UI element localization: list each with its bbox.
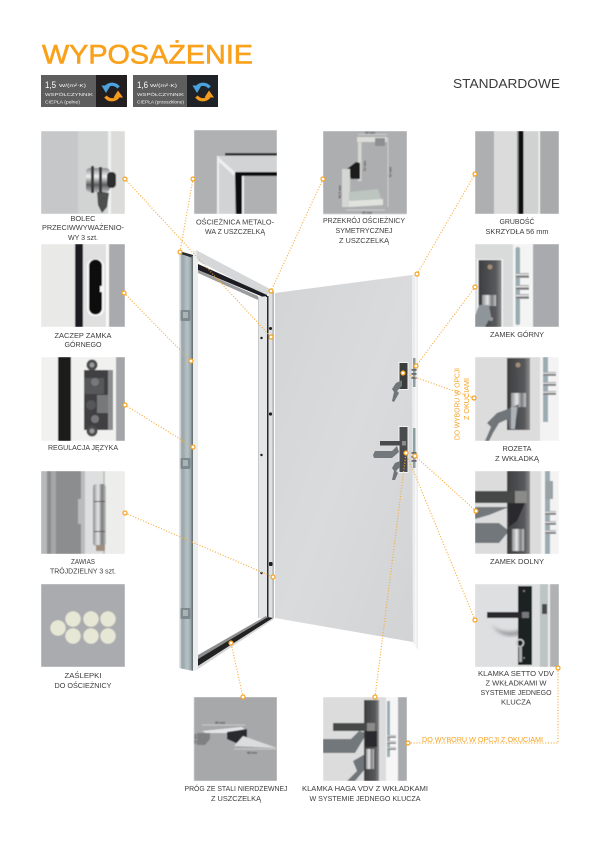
panel: próg — [184, 697, 288, 803]
callout markers — [122, 172, 560, 745]
caption — [42, 214, 125, 242]
photo: Setto handle — [475, 584, 559, 667]
caption — [486, 217, 548, 236]
photo: frame plugs — [41, 584, 125, 667]
panel: ościeżnica — [194, 130, 277, 236]
photo: rosette with cylinder — [475, 357, 558, 441]
caption: GÓRNEGO — [64, 340, 102, 349]
caption: Z USZCZELKĄ — [211, 794, 261, 803]
caption — [478, 669, 554, 706]
caption: PRÓG ZE STALI NIERDZEWNEJ — [184, 784, 288, 793]
caption: OŚCIEŻNICA METALO- — [196, 218, 275, 226]
door frame — [179, 250, 274, 671]
badge: thermal coefficient 1,6: 1,6 — [137, 80, 148, 91]
caption: KLAMKA SETTO VDV — [478, 669, 554, 678]
caption: ZAWIAS — [71, 557, 95, 566]
caption — [323, 216, 405, 245]
caption: Z WKŁADKĄ — [495, 454, 539, 463]
caption: BOLEC — [70, 214, 96, 223]
caption — [495, 444, 539, 463]
photo: metal frame corner — [194, 130, 277, 214]
vertical label: do wyboru w opcji z okuciami: DO WYBORU W OPCJI — [452, 368, 462, 440]
panel: klamka setto — [475, 584, 559, 706]
caption: W SYSTEMIE JEDNEGO KLUCZA — [310, 794, 421, 803]
badge: thermal coefficient 1,5: 1,5 — [45, 80, 56, 91]
panel: przekrój — [323, 131, 407, 245]
photo: upper lock — [475, 244, 559, 327]
photo: upper lock strike — [41, 244, 125, 327]
photo: Haga handle — [323, 697, 407, 781]
caption: DO OŚCIEŻNICY — [54, 681, 112, 690]
vertical label: do wyboru w opcji z okuciami: Z OKUCIAMI — [462, 378, 471, 420]
panel: zawias — [41, 471, 125, 576]
badge: thermal coefficient 1,6: W/(m²·K) — [150, 83, 178, 88]
caption — [196, 218, 275, 236]
caption: PRZECIWWYWAŻENIO- — [42, 223, 125, 232]
caption: Z WKŁADKAMI W — [486, 678, 547, 688]
caption: KLUCZA — [501, 698, 531, 706]
photo: frame cross-section: 49 mm — [362, 211, 372, 215]
panel: zaślepki — [41, 584, 125, 690]
panel: zamek dolny — [475, 471, 559, 566]
badge: thermal coefficient 1,6 — [133, 75, 218, 107]
badge: thermal coefficient 1,5: WSPÓŁCZYNNIK — [45, 91, 94, 97]
photo: frame cross-section — [323, 131, 407, 215]
hinges on frame — [180, 310, 190, 619]
heading: standardowe: STANDARDOWE — [453, 77, 560, 91]
door leaf — [275, 274, 418, 650]
caption — [54, 331, 112, 349]
badge: thermal coefficient 1,6: CIEPŁA (przeszklone) — [137, 100, 184, 104]
photo: frame cross-section: 50 mm — [363, 161, 367, 171]
caption: ZAŚLEPKI — [64, 671, 102, 680]
photo: three-part hinge — [41, 471, 125, 554]
badge: thermal coefficient 1,5: CIEPŁA (pełne) — [45, 100, 81, 104]
label: do wyboru w opcji z okuciami: DO WYBORU W OPCJI Z OKUCIAMI — [422, 735, 543, 744]
photo: frame cross-section: 90 mm — [388, 167, 392, 177]
badge: thermal coefficient 1,6: WSPÓŁCZYNNIK — [137, 91, 185, 97]
photo: anti-burglary bolt — [41, 131, 125, 214]
photo: latch adjustment — [41, 357, 125, 441]
badge: thermal coefficient 1,5 — [41, 75, 127, 107]
caption: PRZEKRÓJ OŚCIEŻNICY — [323, 216, 405, 225]
panel: zaczep — [41, 244, 125, 349]
caption: SYMETRYCZNEJ — [336, 226, 393, 235]
caption: WY 3 szt. — [68, 233, 98, 242]
leader lines — [124, 174, 558, 743]
caption: ZAMEK DOLNY — [490, 557, 544, 566]
photo: stainless threshold: 48 mm — [247, 751, 257, 755]
panel: klamka haga — [302, 697, 428, 803]
caption: ZACZEP ZAMKA — [54, 331, 112, 340]
badge: thermal coefficient 1,5: W/(m²·K) — [59, 83, 87, 88]
frame strike holes — [260, 327, 272, 574]
photo: stainless threshold: 18 mm — [194, 734, 198, 744]
photo: leaf thickness — [475, 131, 559, 214]
title: WYPOSAŻENIE — [42, 38, 253, 70]
panel: zamek górny — [475, 244, 559, 339]
caption: SYSTEMIE JEDNEGO — [480, 688, 552, 697]
caption — [50, 557, 116, 576]
vertical label: do wyboru w opcji z okuciami — [452, 368, 471, 440]
panel: grubość — [475, 131, 559, 236]
caption — [302, 784, 428, 803]
caption: WA Z USZCZELKĄ — [205, 227, 265, 236]
photo: frame cross-section: 34 mm — [365, 131, 375, 135]
caption — [184, 784, 288, 803]
caption: SKRZYDŁA 56 mm — [486, 227, 548, 236]
caption: REGULACJA JĘZYKA — [48, 443, 118, 452]
caption: Z USZCZELKĄ — [339, 236, 389, 245]
panel: bolec — [41, 131, 125, 242]
photo: stainless threshold: 49 mm — [215, 721, 225, 725]
panel: rozeta — [475, 357, 559, 463]
lower lock and handle on door — [373, 426, 416, 480]
panel: regulacja — [41, 357, 125, 452]
photo: stainless threshold — [194, 697, 277, 781]
caption: ROZETA — [502, 444, 532, 453]
caption: ZAMEK GÓRNY — [490, 330, 544, 339]
photo: frame cross-section: 49,5 mm — [338, 185, 342, 199]
caption — [54, 671, 112, 690]
caption: TRÓJDZIELNY 3 szt. — [50, 566, 116, 576]
caption: KLAMKA HAGA VDV Z WKŁADKAMI — [302, 784, 428, 793]
caption: GRUBOŚĆ — [500, 217, 535, 226]
upper lock on door — [392, 358, 416, 402]
door illustration — [179, 250, 418, 671]
photo: lower lock — [475, 471, 558, 554]
